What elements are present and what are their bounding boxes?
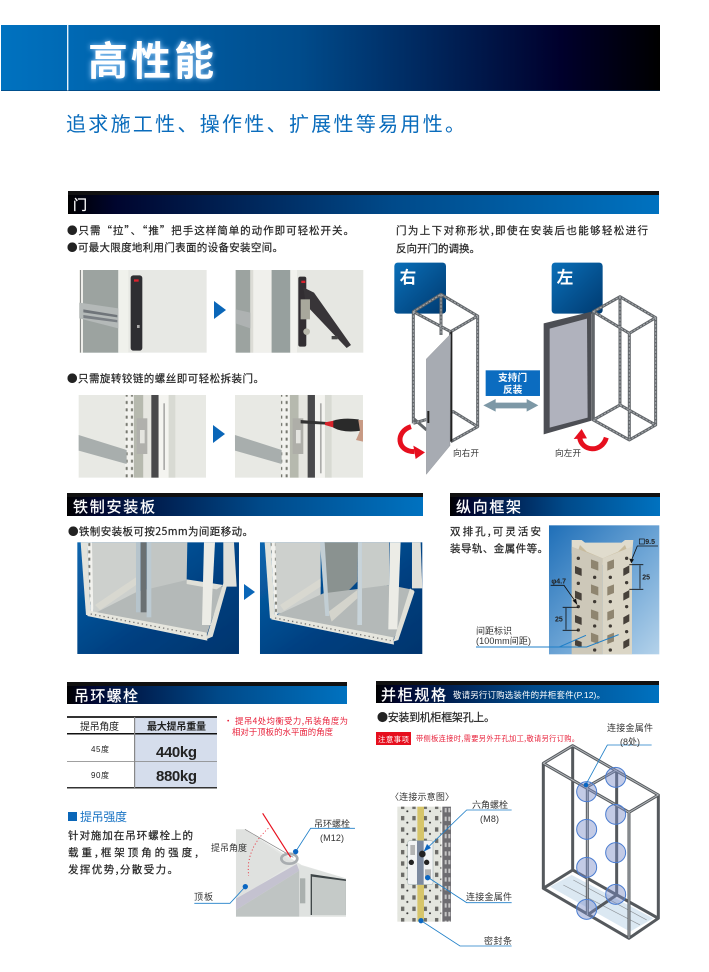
- coupling heading: [376, 681, 659, 704]
- label: connector 8 places: [607, 722, 653, 747]
- vertical frame text: [450, 524, 548, 556]
- panel: eye bolt: [67, 682, 355, 917]
- note: red: 相对于顶板的水平面的角度: [232, 726, 334, 738]
- title: 高性能: [88, 40, 214, 84]
- photos: iron plate: [77, 542, 422, 654]
- notice tag: 注意事项: [378, 734, 410, 744]
- hinge bullet text: ●只需旋转铰链的螺丝即可轻松拆装门。: [67, 371, 264, 386]
- leaders: [194, 828, 355, 903]
- panel: door: [67, 191, 659, 478]
- door reversal text: 反向开门的调换。: [396, 241, 480, 256]
- label: eye bolt: 吊环螺栓: [314, 818, 350, 829]
- cabinet: left-hinged: [544, 297, 656, 440]
- diagram: coupled cabinets: [543, 745, 658, 938]
- coupling bullet text: ●安装到机柜框架孔上。: [377, 709, 495, 725]
- callout: supports reversal: 反装: [503, 384, 523, 396]
- dimension labels: [551, 539, 655, 624]
- lifting strength text: 载重,框架顶角的强度,: [68, 845, 198, 860]
- arrow: red opening left: [574, 429, 606, 449]
- label: hex bolt: [472, 799, 508, 824]
- label: connector: 连接金属件: [466, 891, 512, 902]
- door section heading: [68, 191, 659, 214]
- panel: iron mounting plate: [67, 493, 423, 654]
- vertical frame heading: 纵向框架: [456, 499, 521, 516]
- dimension labels: 9.5: [645, 539, 655, 546]
- door reversal text: 门为上下对称形状,即使在安装后也能够轻松进行: [396, 223, 648, 238]
- note: red: • 提吊4处均衡受力,吊装角度为: [224, 715, 348, 727]
- table: lifting capacity: 最大提吊重量: [147, 720, 206, 733]
- lifting strength text: [68, 828, 198, 877]
- door bullet text: [67, 223, 354, 255]
- leaders: [421, 810, 512, 946]
- header banner: [1, 25, 660, 91]
- label: hex bolt: 六角螺栓: [472, 799, 508, 810]
- lifting strength text: 发挥优势,分散受力。: [68, 862, 178, 877]
- badge: left: 左: [557, 268, 573, 287]
- notice text: 带侧板连接时,需要另外开孔加工,敬请另行订购。: [416, 734, 579, 744]
- vertical frame text: 装导轨、金属件等。: [450, 541, 548, 556]
- leader: [586, 745, 652, 784]
- label: top plate: 顶板: [194, 891, 213, 902]
- coupling heading: 敬请另行订购选装件的并柜套件(P.12)。: [453, 690, 605, 700]
- label: pitch mark: [476, 625, 531, 646]
- diagram: eye bolt angle: [194, 813, 355, 917]
- table: lifting capacity: 880kg: [156, 768, 197, 785]
- leader: pitch mark: [476, 635, 619, 647]
- door bullet text: ●可最大限度地利用门表面的设备安装空间。: [67, 240, 283, 255]
- arrow: handle: [214, 301, 226, 319]
- label: connector 8 places: 连接金属件: [607, 722, 653, 733]
- vertical frame text: 双排孔,可灵活安: [450, 524, 541, 539]
- door section heading: 门: [73, 197, 87, 213]
- panel: side-by-side coupling: [376, 681, 659, 946]
- iron plate heading: 铁制安装板: [73, 498, 155, 516]
- label: diagram title: 〈连接示意图〉: [390, 791, 454, 802]
- arrow: red opening right: [400, 427, 425, 459]
- subtitle: 追求施工性、操作性、扩展性等易用性。: [66, 113, 465, 136]
- photo: perforated column with dimensions: [476, 525, 659, 654]
- label: opens right: 向右开: [453, 448, 479, 458]
- vertical frame heading: [450, 493, 660, 516]
- eye bolt heading: [67, 682, 347, 705]
- label: seal: 密封条: [484, 935, 512, 946]
- header banner: 高性能: [88, 40, 214, 84]
- photos: door handle: [79, 270, 363, 353]
- eye bolt heading: 吊环螺栓: [74, 688, 138, 705]
- diagram: door reversal: [394, 263, 656, 474]
- coupling heading: 并柜规格: [381, 687, 446, 704]
- door bullet text: ●只需“拉”、“推”把手这样简单的动作即可轻松开关。: [67, 223, 354, 238]
- diagram: connection detail: [397, 807, 512, 946]
- iron plate text: ●铁制安装板可按25mm为间距移动。: [68, 524, 253, 539]
- label: hex bolt: (M8): [480, 814, 499, 824]
- table: lifting capacity: 45度: [91, 744, 109, 754]
- lifting strength text: 针对施加在吊环螺栓上的: [68, 828, 193, 843]
- badge: right: [394, 263, 446, 314]
- callout: supports reversal: 支持门: [498, 372, 527, 384]
- callout: supports reversal: [486, 370, 540, 396]
- dimension labels: 25: [642, 574, 650, 581]
- arrow: hinge: [213, 425, 225, 443]
- dimension labels: φ4.7: [551, 578, 566, 585]
- label: eye bolt: (M12): [320, 833, 344, 843]
- panel: vertical frame: [450, 493, 660, 654]
- label: lift angle: 提吊角度: [211, 842, 247, 853]
- arrow: iron plate: [244, 584, 255, 600]
- badge: right: 右: [400, 268, 416, 287]
- photos: hinge: [79, 395, 363, 478]
- label: opens left: 向左开: [555, 448, 581, 458]
- table: lifting capacity: 440kg: [156, 744, 197, 761]
- label: pitch mark: (100mm间距): [476, 635, 531, 646]
- label: connector 8 places: (8处): [620, 736, 640, 747]
- cabinet: right-hinged: [413, 294, 478, 474]
- label: eye bolt: [314, 818, 350, 843]
- iron plate heading: [67, 493, 423, 516]
- note: red: [224, 715, 348, 738]
- notice tag: [376, 732, 411, 745]
- connector highlight circles: [577, 767, 626, 919]
- badge: left: [552, 263, 603, 314]
- table: lifting capacity: 提吊角度: [80, 720, 119, 733]
- door reversal text: [396, 223, 648, 256]
- table: lifting capacity: [67, 716, 217, 788]
- label: pitch mark: 间距标识: [476, 625, 512, 636]
- dimension labels: 25: [555, 617, 563, 624]
- table: lifting capacity: 90度: [91, 770, 109, 780]
- arrow: double: [483, 399, 538, 412]
- subheading: lifting strength: 提吊强度: [80, 809, 127, 824]
